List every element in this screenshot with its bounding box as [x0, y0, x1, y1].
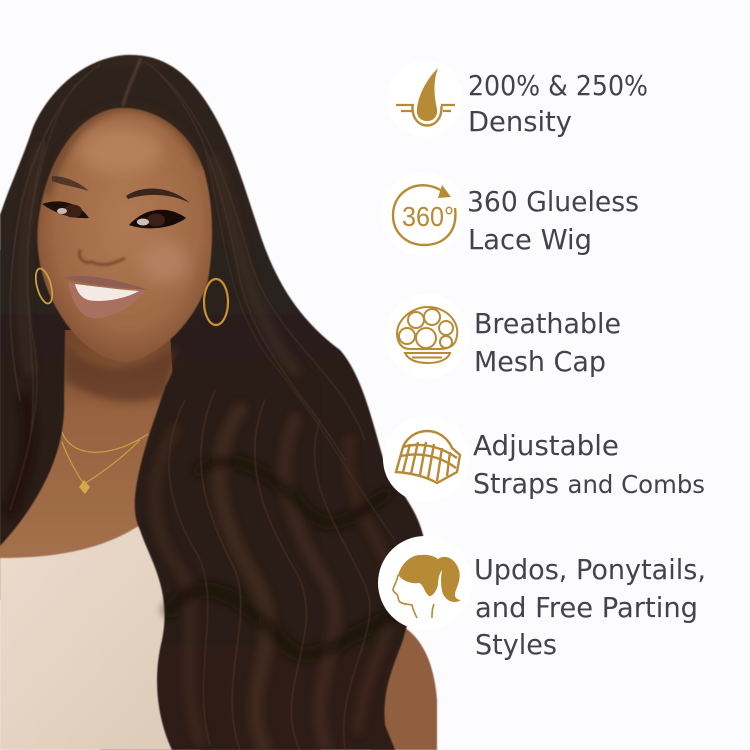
text: mesh cap: Mesh Cap: [474, 346, 606, 378]
icon badge: 360: 360°: [402, 201, 454, 232]
feature 5: styles: [378, 536, 706, 661]
text: density: 200% & 250%: [468, 70, 648, 102]
hair parting: [123, 58, 141, 106]
forehead highlight: [78, 126, 162, 174]
necklace pendant: [79, 480, 90, 494]
hair strands: [10, 62, 400, 750]
icon badge: 360: [381, 172, 465, 256]
left hair lock: [0, 250, 65, 546]
neck shadow: [64, 345, 178, 402]
chest and neck: [0, 330, 175, 600]
icon badge: ponytail profile: [378, 536, 472, 630]
text: straps and combs: Adjustable: [473, 430, 619, 462]
text: density: Density: [468, 106, 572, 138]
tank top: [0, 525, 200, 750]
right earring: [204, 279, 228, 325]
text: 360 glueless: Lace Wig: [468, 224, 592, 256]
feature 4: straps and combs: [383, 416, 705, 502]
text: mesh cap: Breathable: [474, 308, 621, 340]
fine strands: [10, 62, 395, 750]
text: styles: Updos, Ponytails,: [474, 554, 706, 586]
arm: [370, 625, 437, 750]
text: straps and combs: Straps and Combs: [473, 468, 709, 500]
text: styles: Styles: [475, 629, 557, 661]
necklaces: [62, 432, 148, 484]
nose: [79, 250, 125, 265]
upper lip: [64, 276, 149, 290]
cheek highlight: [141, 240, 189, 284]
left eyebrow: [52, 176, 89, 191]
teeth: [75, 284, 139, 301]
lower lip: [68, 282, 146, 318]
feature 3: mesh cap: [385, 294, 621, 378]
wave sheen: [10, 150, 400, 750]
hairline shadow: [46, 106, 202, 195]
icon badge: adjustable cap: [383, 416, 469, 502]
left earring: [33, 267, 55, 305]
text: 360 glueless: 360 Glueless: [467, 186, 639, 218]
text: styles: and Free Parting: [475, 592, 698, 624]
model portrait illustration: [0, 55, 437, 750]
icon badge: mesh cap: [385, 294, 469, 378]
hair back mass: [0, 55, 425, 750]
left eye: [42, 201, 89, 218]
right eye: [129, 210, 186, 228]
right hair lock: [135, 280, 320, 750]
right eyebrow: [126, 189, 190, 203]
feature 1: density: [387, 61, 648, 138]
icon badge: density: [387, 61, 463, 137]
face: [37, 108, 212, 362]
feature 2: 360 glueless: [381, 172, 639, 256]
